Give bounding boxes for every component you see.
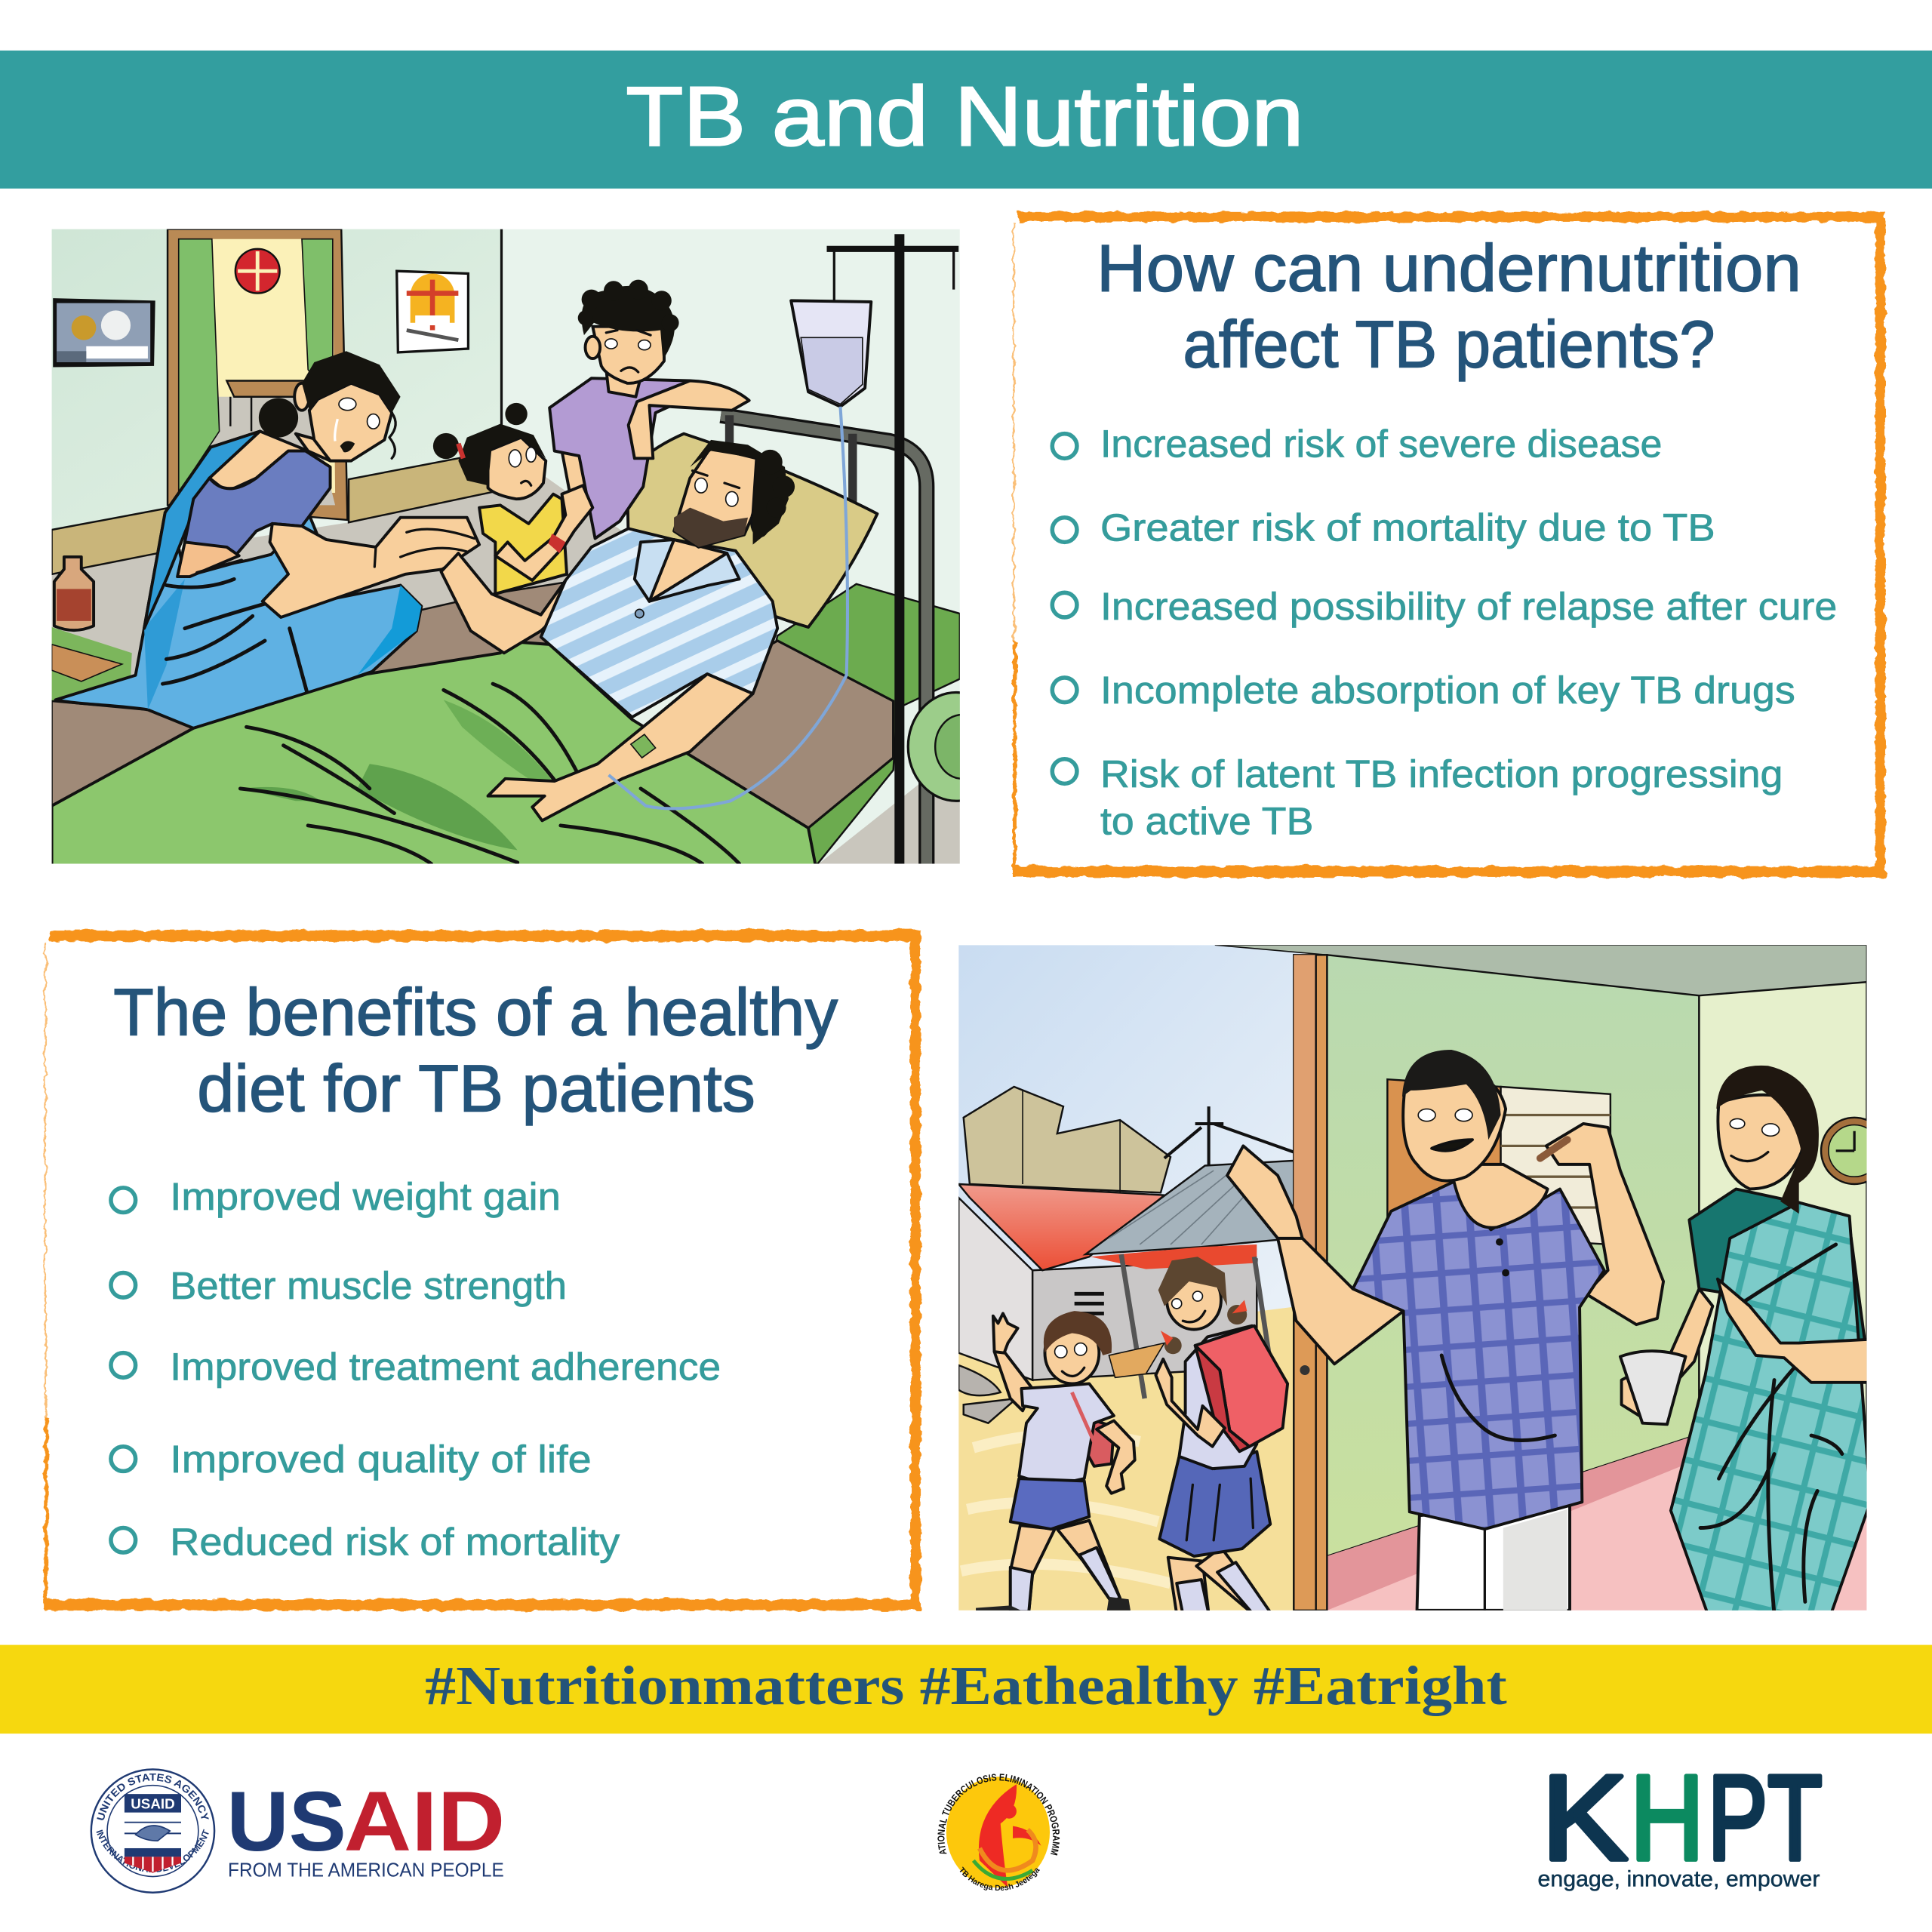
bullet list: Better muscle strength: [170, 1264, 567, 1307]
logo: National TB Elimination Programme: NATIONAL TUBERCULOSIS ELIMINATION PROGRAMME: [937, 1774, 1060, 1856]
head: [1044, 1322, 1099, 1383]
waist: [177, 542, 239, 577]
poster: TB: [397, 271, 468, 352]
woman: [55, 351, 479, 728]
USAID tagline: FROM THE AMERICAN PEOPLE: [228, 1859, 504, 1881]
shirt: [541, 528, 777, 717]
bullet list: Risk of latent TB infection progressing: [1100, 752, 1783, 795]
shirt: [1179, 1326, 1257, 1469]
utility pole: [1164, 1106, 1294, 1171]
skirt: [1159, 1451, 1270, 1556]
neck: [296, 434, 331, 461]
backpack: [1195, 1326, 1287, 1447]
left arm held by wife: [441, 553, 583, 653]
arms and bag: [995, 1352, 1032, 1411]
door post: [1294, 955, 1327, 1611]
arm and hands: [263, 518, 479, 617]
bullet list: [1052, 423, 1837, 842]
far floor: [816, 752, 960, 866]
USAID seal: [91, 1768, 216, 1894]
raised arm and hand: [1278, 1238, 1404, 1364]
orange frame: [1013, 212, 1885, 877]
head: [674, 448, 756, 547]
legs: [1011, 1525, 1055, 1612]
other arm and pill hand: [1546, 1124, 1663, 1324]
logo: KHPT: [1538, 1750, 1823, 1892]
bed frame right: [764, 584, 960, 866]
logo: National TB Elimination Programme: [937, 1774, 1060, 1890]
bullet list: to active TB: [1100, 799, 1313, 842]
basin: [908, 693, 1004, 801]
girl: [1155, 1257, 1287, 1614]
man: [1227, 1050, 1663, 1611]
hashtag banner: [0, 1645, 1932, 1734]
woman: [1620, 1066, 1870, 1614]
house: [958, 1184, 1257, 1380]
logo: National TB Elimination Programme: TB Harega Desh Jeetega: [960, 1866, 1040, 1890]
tablet strip: [52, 645, 122, 681]
IV stand and drip: [609, 234, 958, 863]
USAID seal: UNITED STATES AGENCY: [97, 1774, 209, 1820]
girl: [433, 403, 592, 594]
bullet list: Increased risk of severe disease: [1100, 423, 1662, 466]
arm and glass: [1622, 1289, 1712, 1423]
logo: USAID: AID: [344, 1774, 505, 1869]
face: [309, 383, 392, 461]
heading: diet for TB patients: [197, 1051, 755, 1126]
mattress: [52, 583, 894, 828]
poster: nutrition: [53, 298, 155, 368]
headboard: [721, 415, 927, 863]
bullet list: Improved weight gain: [170, 1175, 561, 1218]
shirt: [1353, 1182, 1604, 1529]
panel: how can undernutrition affect TB patients: [1013, 212, 1885, 877]
legs: [1168, 1558, 1209, 1614]
heading: affect TB patients?: [1183, 307, 1715, 382]
hashtags: #Nutritionmatters #Eathealthy #Eatright: [425, 1655, 1507, 1716]
KHPT tagline: engage, innovate, empower: [1538, 1867, 1820, 1892]
USAID seal: INTERNATIONAL DEVELOPMENT: [97, 1829, 209, 1872]
panel: benefits of a healthy diet: [45, 931, 921, 1611]
bullet list: Greater risk of mortality due to TB: [1100, 506, 1715, 549]
boy: [549, 280, 749, 538]
saree: [1671, 1202, 1870, 1614]
orange frame: [45, 931, 921, 1611]
wall clock: [1821, 1118, 1887, 1184]
head: [1718, 1095, 1811, 1189]
rubble: [958, 1365, 1017, 1423]
heading: How can undernutrition: [1097, 230, 1801, 305]
heading: The benefits of a healthy: [113, 974, 838, 1049]
pillow: [627, 434, 877, 627]
bullet list: Incomplete absorption of key TB drugs: [1100, 669, 1795, 712]
logo: KHPT: PT: [1708, 1750, 1823, 1885]
bullet list: [111, 1175, 721, 1563]
logo: KHPT: K: [1541, 1750, 1628, 1885]
head: [1164, 1337, 1182, 1354]
back skin: [210, 431, 308, 491]
bullet list: Reduced risk of mortality: [170, 1520, 620, 1563]
USAID wordmark: US: [226, 1774, 346, 1869]
bullet list: Improved quality of life: [170, 1438, 592, 1481]
logo: USAID: [91, 1768, 505, 1894]
bullet list: Increased possibility of relapse after cure: [1100, 585, 1837, 628]
shirt and shorts: [1019, 1383, 1114, 1486]
illustration: family at hospital bedside: [51, 229, 960, 863]
interior door and window: [1387, 1079, 1611, 1244]
ground: [958, 1306, 1300, 1611]
head: [1403, 1072, 1506, 1181]
title banner: [0, 51, 1932, 189]
buildings: [964, 1087, 1171, 1192]
saree skirt and pallu: [55, 431, 421, 728]
medicine bottle: [54, 557, 94, 630]
room: ceiling, walls, floor: [1215, 945, 1866, 1611]
boy: [976, 1311, 1135, 1614]
door: [168, 229, 347, 520]
patient: [441, 440, 795, 820]
blouse: [185, 451, 331, 555]
bullet list: Improved treatment adherence: [170, 1346, 721, 1389]
logo: KHPT: H: [1630, 1750, 1704, 1885]
skirting and floor: [52, 450, 690, 709]
forearm with IV: [488, 674, 753, 820]
blouse: [1689, 1189, 1866, 1355]
saree fold lines: [163, 561, 308, 696]
USAID seal: USAID: [131, 1796, 175, 1812]
forearm and raised hand: [1718, 1279, 1870, 1383]
tin shed: [1085, 1161, 1294, 1398]
illustration: recovered family at home: [958, 945, 1867, 1611]
heading: [1097, 230, 1801, 382]
heading: [113, 974, 838, 1126]
title: TB and Nutrition: [626, 69, 1303, 164]
blanket: [52, 642, 816, 866]
arm: [1155, 1359, 1225, 1447]
